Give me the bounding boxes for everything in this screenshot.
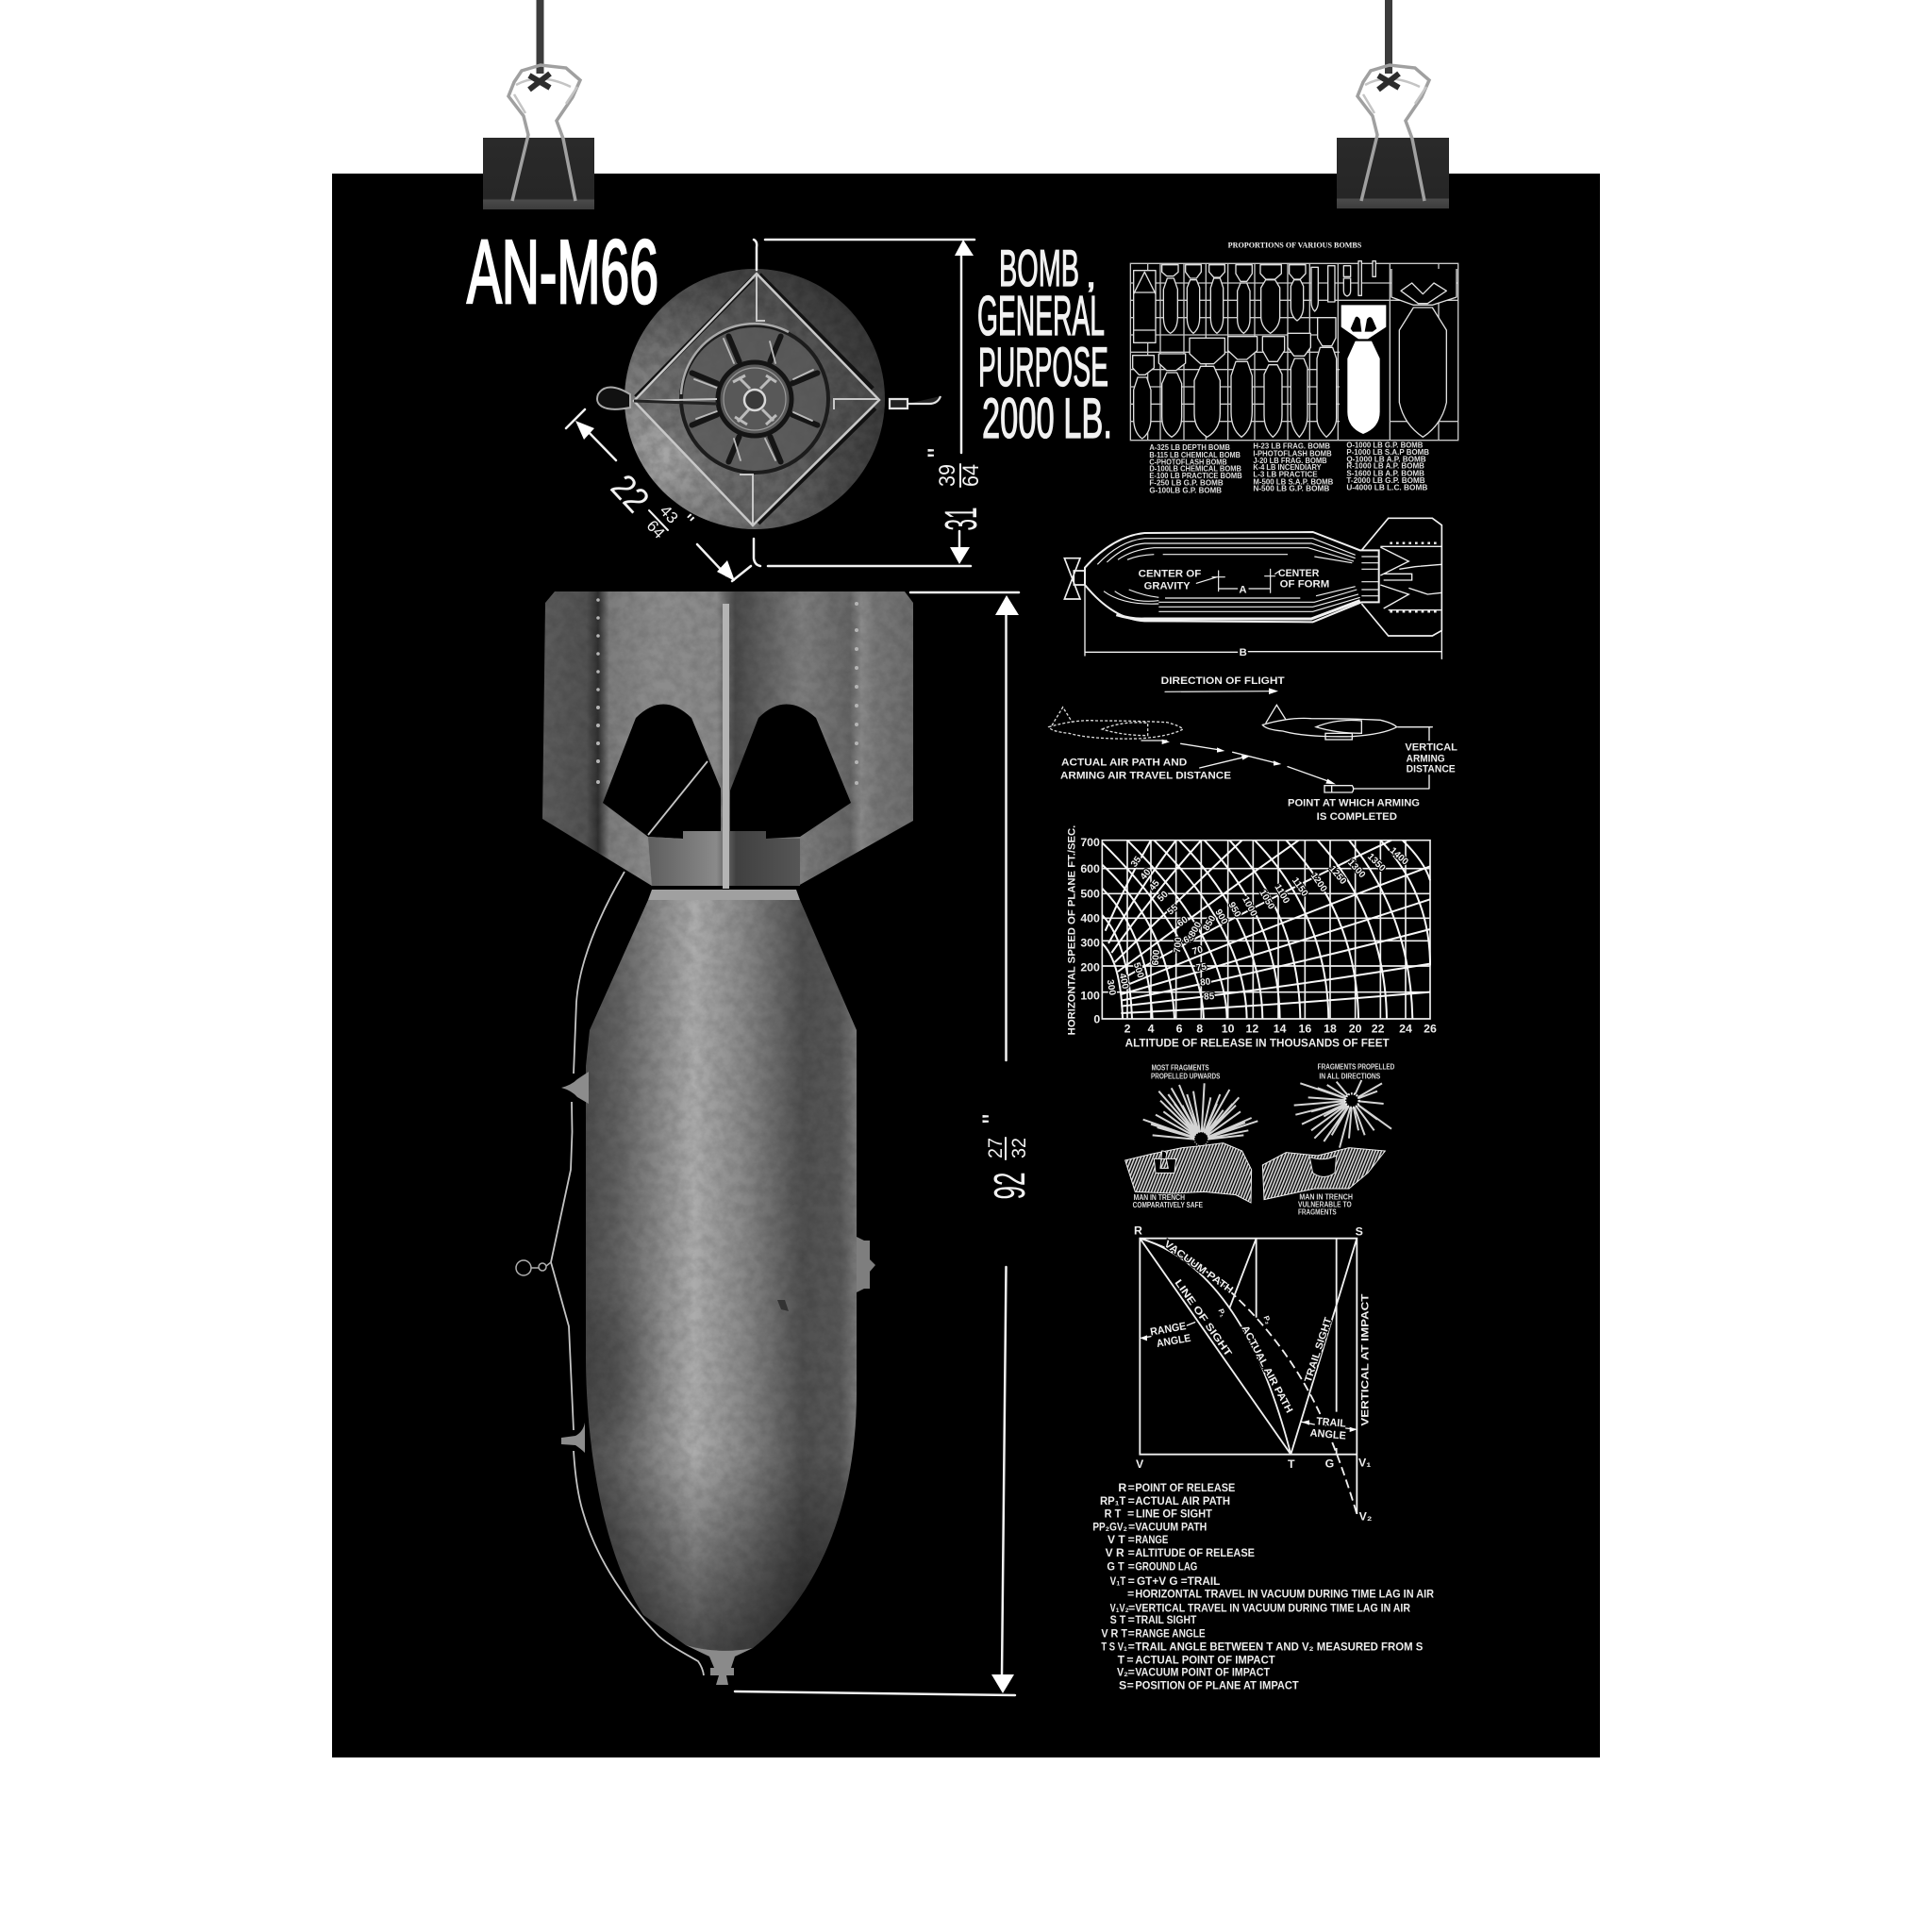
binder clip: right <box>1337 0 1449 208</box>
curve labels: 1400 <box>1388 845 1410 868</box>
legend: trail and range definitions: = <box>1127 1678 1134 1691</box>
legend: trail and range definitions: V R <box>1106 1546 1124 1559</box>
legend, column 3: T-2000 LB G.P. BOMB <box>1346 476 1425 485</box>
legend: trail and range definitions: = <box>1128 1626 1135 1640</box>
legend: trail and range definitions: G T <box>1107 1560 1124 1574</box>
dimension: height 31 39/64 <box>754 240 987 566</box>
labels: centre of gravity / form: GRAVITY <box>1144 580 1191 591</box>
x axis labels: 22 <box>1372 1022 1385 1035</box>
legend, column 2: K-4 LB INCENDIARY <box>1253 463 1322 472</box>
legend: trail and range definitions: V₁V₂ <box>1110 1601 1129 1614</box>
blemish <box>777 1300 789 1311</box>
bomb photograph, side view <box>516 591 915 1685</box>
dimension: length 92 27/32: 27 <box>985 1138 1007 1158</box>
legend, column 1: A-325 LB DEPTH BOMB <box>1149 443 1230 452</box>
band <box>648 890 800 900</box>
curve labels <box>1105 845 1410 1003</box>
nose hook <box>597 387 630 409</box>
frame and path lines <box>1140 1239 1357 1514</box>
legend, column 1: G-100LB G.P. BOMB <box>1149 486 1222 494</box>
legend, column 2: H-23 LB FRAG. BOMB <box>1253 441 1330 450</box>
x axis labels: 6 <box>1176 1022 1183 1035</box>
legend: trail and range definitions: V R T <box>1101 1626 1127 1640</box>
dimension: length 92 27/32: 32 <box>1008 1138 1030 1158</box>
path labels: ACTUAL AIR PATH <box>1239 1324 1294 1415</box>
heading: bomb general purpose: GENERAL <box>977 285 1105 347</box>
y axis labels: 700 <box>1080 836 1100 849</box>
y axis labels: 100 <box>1080 989 1100 1002</box>
legend, column 2: N-500 LB G.P. BOMB <box>1253 485 1330 493</box>
curve labels: 55 <box>1165 903 1180 917</box>
heading: bomb general purpose: PURPOSE <box>978 337 1108 398</box>
fragmentation, ground burst: COMPARATIVELY SAFE <box>1133 1201 1204 1209</box>
legend: trail and range definitions: RP₁T <box>1100 1494 1126 1507</box>
label: arming point: IS COMPLETED <box>1317 811 1397 823</box>
legend: trail and range definitions: R <box>1118 1481 1126 1494</box>
curve labels: 1050 <box>1257 888 1276 912</box>
curve labels: 950 <box>1225 900 1242 920</box>
diagram: proportions of various bombs <box>1130 242 1458 494</box>
vertical arming distance: ARMING <box>1407 753 1445 764</box>
curve labels: 70 <box>1191 944 1205 958</box>
lower suspension lug <box>561 1423 585 1453</box>
direction of flight <box>1161 675 1285 694</box>
curve labels: 35 <box>1129 855 1144 870</box>
binder clip: left <box>483 0 594 209</box>
legend: trail and range definitions: = <box>1128 1494 1135 1507</box>
x axis labels: 16 <box>1298 1022 1311 1035</box>
range angle label: ANGLE <box>1156 1333 1192 1350</box>
legend: trail and range definitions: RANGE <box>1135 1533 1168 1546</box>
dimension: diameter 22 43/64: 64 <box>643 517 668 542</box>
legend: trail and range definitions: V₁T <box>1110 1574 1126 1588</box>
diagram title: PROPORTIONS OF VARIOUS BOMBS <box>1228 242 1362 250</box>
curve labels: 1300 <box>1345 858 1368 880</box>
central fin <box>723 604 729 889</box>
y axis labels: 500 <box>1080 888 1100 901</box>
path labels: VACUUM PATH <box>1162 1239 1235 1296</box>
corner labels: R <box>1134 1224 1142 1238</box>
legend: trail and range definitions: RANGE ANGLE <box>1135 1626 1206 1640</box>
legend: trail and range definitions: = <box>1128 1666 1135 1679</box>
dimension: height 31 39/64: 64 <box>958 464 984 487</box>
legend: trail and range definitions: T <box>1118 1654 1125 1667</box>
x axis title: ALTITUDE OF RELEASE IN THOUSANDS OF FEET <box>1125 1037 1390 1050</box>
trail angle label: TRAIL <box>1316 1416 1346 1430</box>
legend, column 3: S-1600 LB A.P. BOMB <box>1346 469 1424 477</box>
air path arrows <box>1141 740 1336 784</box>
curve labels: 75 <box>1195 962 1208 974</box>
y axis labels: 200 <box>1080 960 1100 974</box>
curve labels: 45 <box>1147 878 1162 893</box>
x axis labels: 20 <box>1349 1022 1362 1035</box>
legend: trail and range definitions: PP₂GV₂ <box>1092 1521 1127 1534</box>
arming wires <box>634 274 879 525</box>
curve labels: 700 <box>1173 937 1184 954</box>
diagram: centre of gravity and arming distance <box>1049 518 1457 823</box>
fragmentation, ground burst <box>1125 1064 1257 1209</box>
aeroplane, dashed <box>1049 708 1183 739</box>
legend: trail and range definitions: = <box>1128 1481 1135 1494</box>
legend: trail and range definitions: T S V₁ <box>1101 1641 1127 1654</box>
x axis labels <box>1124 1022 1437 1035</box>
curve labels: 85 <box>1204 991 1215 1003</box>
legend: trail and range definitions: = <box>1128 1601 1135 1614</box>
legend: trail and range definitions: ACTUAL POINT OF IMPACT <box>1135 1654 1275 1667</box>
curve labels: 1100 <box>1272 883 1291 906</box>
legend: trail and range definitions: R T <box>1105 1507 1122 1521</box>
y axis labels: 300 <box>1080 937 1100 950</box>
x axis labels: 24 <box>1399 1022 1412 1035</box>
dimension: diameter 22 43/64: 43 <box>657 502 681 527</box>
dimension: diameter 22 43/64: " <box>675 510 698 533</box>
chart frame and grid <box>1102 841 1430 1019</box>
tail texture <box>542 591 915 889</box>
legend: trail and range definitions: = <box>1128 1574 1135 1588</box>
labels: centre of gravity / form: OF FORM <box>1280 579 1329 591</box>
legend: trail and range definitions: = <box>1127 1507 1134 1521</box>
fragmentation, air burst: FRAGMENTS PROPELLED <box>1318 1062 1395 1071</box>
x axis labels: 10 <box>1222 1022 1235 1035</box>
curve labels: 850 <box>1201 913 1219 933</box>
nose fuze <box>686 1645 753 1685</box>
legend: trail and range definitions: TRAIL SIGHT <box>1135 1613 1197 1626</box>
legend: trail and range definitions: = <box>1128 1560 1135 1574</box>
x axis labels: 12 <box>1245 1022 1258 1035</box>
y axis labels: 400 <box>1080 912 1100 925</box>
upper suspension lug <box>561 1072 589 1104</box>
corner labels: G <box>1325 1457 1334 1470</box>
legend: trail and range definitions: VACUUM POINT OF IMPACT <box>1135 1666 1270 1679</box>
y axis labels <box>1080 836 1100 1025</box>
legend: trail and range definitions: GROUND LAG <box>1135 1560 1197 1574</box>
angle rays <box>1106 841 1430 1013</box>
legend, column 1 <box>1149 443 1242 494</box>
curve labels: 1150 <box>1290 875 1310 899</box>
heading: bomb general purpose: 2000 LB. <box>982 387 1112 450</box>
legend: trail and range definitions: HORIZONTAL TRAVEL IN VACUUM DURING TIME LAG IN AIR <box>1135 1588 1434 1601</box>
x axis labels: 4 <box>1148 1022 1155 1035</box>
path labels: LINE OF SIGHT <box>1173 1277 1234 1359</box>
curve labels: 60 <box>1175 914 1191 929</box>
hub <box>718 362 791 436</box>
legend, column 3: O-1000 LB G.P. BOMB <box>1346 441 1424 449</box>
legend: trail and range definitions: POSITION OF PLANE AT IMPACT <box>1135 1678 1299 1691</box>
dimension: length 92 27/32: " <box>977 1114 1008 1124</box>
fin ring <box>681 325 828 473</box>
vacuum path <box>1140 1239 1229 1291</box>
path labels <box>1162 1239 1372 1426</box>
curve labels: 400 <box>1117 973 1130 991</box>
dimension B <box>1085 585 1441 658</box>
fragmentation, air burst: VULNERABLE TO <box>1298 1200 1352 1208</box>
dimension: height 31 39/64: 39 <box>935 464 960 487</box>
dimension: diameter 22 43/64: 22 <box>603 467 657 521</box>
corner labels: P₁ <box>1216 1307 1227 1319</box>
x axis labels: 2 <box>1124 1022 1131 1035</box>
legend, column 2: L-3 LB PRACTICE <box>1253 471 1318 479</box>
legend: trail and range definitions: = <box>1128 1641 1135 1654</box>
y axis labels: 600 <box>1080 862 1100 875</box>
range angle label: RANGE <box>1149 1321 1188 1339</box>
trail angle label: ANGLE <box>1309 1427 1347 1442</box>
corner labels: P₂ <box>1261 1315 1273 1325</box>
corner labels: V₂ <box>1359 1510 1372 1524</box>
spokes <box>692 336 817 462</box>
vertical arming distance: VERTICAL <box>1405 742 1457 754</box>
fragmentation, air burst: MAN IN TRENCH <box>1299 1192 1353 1201</box>
legend: trail and range definitions: TRAIL ANGLE BETWEEN T AND V₂ MEASURED FROM S <box>1135 1641 1423 1654</box>
labels: centre of gravity / form: CENTER OF <box>1139 569 1201 580</box>
legend: trail and range definitions: VERTICAL TRAVEL IN VACUUM DURING TIME LAG IN AIR <box>1135 1601 1410 1614</box>
legend: trail and range definitions <box>1092 1481 1434 1691</box>
diagram: trail and range geometry <box>1134 1224 1372 1524</box>
x axis labels: 8 <box>1196 1022 1203 1035</box>
shadow patch <box>592 1315 644 1421</box>
legend, column 1: C-PHOTOFLASH BOMB <box>1149 458 1227 466</box>
fragmentation, ground burst: MAN IN TRENCH <box>1134 1193 1185 1202</box>
dimension: diameter 22 43/64 <box>566 409 751 581</box>
aeroplane, solid <box>1262 705 1397 740</box>
legend: trail and range definitions: = <box>1128 1521 1135 1534</box>
fragmentation, ground burst: MOST FRAGMENTS <box>1152 1064 1209 1073</box>
dimension: height 31 39/64: 31 <box>937 508 987 530</box>
legend: trail and range definitions: S <box>1119 1678 1126 1691</box>
fragmentation, air burst: FRAGMENTS <box>1298 1208 1337 1217</box>
legend, column 2: M-500 LB S.A.P. BOMB <box>1253 477 1334 486</box>
arming wire <box>551 761 708 1675</box>
dimension B: B <box>1240 647 1247 658</box>
legend: trail and range definitions: = <box>1126 1654 1134 1667</box>
curve labels: 40 <box>1139 867 1154 882</box>
heading: bomb general purpose <box>977 239 1112 450</box>
dimension: length 92 27/32 <box>735 592 1034 1695</box>
corner labels: V₁ <box>1358 1457 1371 1470</box>
legend, column 2: I-PHOTOFLASH BOMB <box>1253 449 1332 458</box>
bomb cross-section <box>1064 518 1441 636</box>
curve labels: 300 <box>1105 979 1117 996</box>
body texture <box>580 896 863 1651</box>
legend: trail and range definitions: S T <box>1110 1613 1126 1626</box>
curve labels: 1000 <box>1240 895 1259 919</box>
legend: trail and range definitions: = <box>1127 1588 1134 1601</box>
fragmentation, air burst: IN ALL DIRECTIONS <box>1319 1072 1381 1080</box>
legend: trail and range definitions: VACUUM PATH <box>1135 1521 1207 1534</box>
legend, column 3: P-1000 LB S.A.P BOMB <box>1346 448 1429 457</box>
label: arming point <box>1288 798 1420 823</box>
curve labels: 800 <box>1187 920 1205 939</box>
arming pin <box>890 396 941 408</box>
legend: trail and range definitions: = <box>1128 1533 1135 1546</box>
legend: trail and range definitions: V T <box>1108 1533 1125 1546</box>
T: 2000 lb bomb highlighted <box>1341 305 1386 434</box>
nose shading <box>586 900 857 1651</box>
label: air path: ARMING AIR TRAVEL DISTANCE <box>1060 771 1231 782</box>
poster panel <box>332 174 1600 1757</box>
legend, column 3: U-4000 LB L.C. BOMB <box>1346 484 1428 492</box>
legend, column 3: Q-1000 LB A.P. BOMB <box>1346 456 1426 464</box>
legend: trail and range definitions: V₂ <box>1117 1666 1128 1679</box>
corner labels <box>1134 1224 1372 1524</box>
title: AN-M66: AN-M66 <box>467 222 658 323</box>
legend: trail and range definitions: GT+V G =TRAIL <box>1137 1574 1221 1588</box>
y axis labels: 0 <box>1093 1012 1100 1025</box>
curve labels: 1250 <box>1326 864 1348 887</box>
legend, column 3 <box>1346 441 1429 492</box>
trail angle label <box>1302 1416 1357 1442</box>
legend, column 2: J-20 LB FRAG. BOMB <box>1253 457 1327 465</box>
corner labels: V <box>1136 1457 1144 1471</box>
range angle label <box>1140 1321 1195 1350</box>
range curves <box>1102 841 1430 1019</box>
labels: centre of gravity / form: CENTER <box>1278 568 1319 579</box>
body <box>586 900 857 1651</box>
legend, column 3: R-1000 LB A.P. BOMB <box>1346 462 1424 471</box>
curve labels: 600 <box>1151 949 1162 966</box>
legend, column 1: F-250 LB G.P. BOMB <box>1149 479 1224 488</box>
dimension: length 92 27/32: 92 <box>985 1172 1034 1200</box>
curve labels: 80 <box>1200 976 1211 989</box>
legend: trail and range definitions: = <box>1128 1546 1135 1559</box>
curve labels: 900 <box>1212 908 1229 926</box>
vertical arming distance: DISTANCE <box>1407 763 1456 774</box>
x axis labels: 14 <box>1274 1022 1287 1035</box>
legend: trail and range definitions: ACTUAL AIR PATH <box>1135 1494 1230 1507</box>
legend: trail and range definitions: = <box>1128 1613 1135 1626</box>
chart: altitude of release vs horizontal speed <box>1066 825 1437 1217</box>
legend, column 1: B-115 LB CHEMICAL BOMB <box>1149 451 1241 459</box>
legend: trail and range definitions: POINT OF RELEASE <box>1135 1481 1235 1494</box>
legend, column 1: D-100LB CHEMICAL BOMB <box>1149 465 1241 474</box>
label: air path <box>1060 757 1231 782</box>
labels: centre of gravity / form <box>1139 568 1329 596</box>
legend, column 2 <box>1253 441 1334 493</box>
curve labels: 50 <box>1156 889 1171 904</box>
curve labels: 1200 <box>1308 871 1329 894</box>
bomb at arming point <box>1324 786 1354 792</box>
fragmentation, air burst <box>1262 1062 1395 1217</box>
grid <box>1130 263 1458 441</box>
legend: trail and range definitions: ALTITUDE OF RELEASE <box>1135 1546 1255 1559</box>
right suspension lug <box>857 1237 875 1292</box>
x axis labels: 18 <box>1324 1022 1337 1035</box>
label: arming point: POINT AT WHICH ARMING <box>1288 798 1420 809</box>
corner labels: S <box>1356 1224 1363 1238</box>
rivets <box>596 598 858 785</box>
tail fins <box>542 591 913 886</box>
path labels: TRAIL SIGHT <box>1303 1316 1334 1384</box>
y axis title: HORIZONTAL SPEED OF PLANE FT./SEC. <box>1066 825 1077 1035</box>
small bomb outlines <box>1133 261 1457 439</box>
labels: centre of gravity / form: A <box>1239 585 1247 596</box>
x axis labels: 26 <box>1424 1022 1437 1035</box>
neck <box>648 831 800 886</box>
legend, column 1: E-100 LB PRACTICE BOMB <box>1149 472 1242 480</box>
legend: trail and range definitions: LINE OF SIGHT <box>1136 1507 1212 1521</box>
fragmentation, ground burst: PROPELLED UPWARDS <box>1151 1072 1221 1080</box>
tail-end view of bomb <box>597 268 941 532</box>
corner labels: T <box>1288 1457 1295 1471</box>
heading: bomb general purpose: , <box>1086 254 1096 295</box>
wire ring <box>516 1260 551 1275</box>
heading: bomb general purpose: BOMB <box>999 239 1079 297</box>
vertical arming distance <box>1354 727 1457 789</box>
dimension: height 31 39/64: " <box>923 448 954 458</box>
curve labels: 65 <box>1182 932 1196 946</box>
label: air path: ACTUAL AIR PATH AND <box>1061 757 1187 768</box>
path labels: VERTICAL AT IMPACT <box>1360 1293 1372 1426</box>
direction of flight: DIRECTION OF FLIGHT <box>1161 675 1285 687</box>
curve labels: 1350 <box>1365 852 1388 874</box>
curve labels: 500 <box>1131 961 1145 980</box>
